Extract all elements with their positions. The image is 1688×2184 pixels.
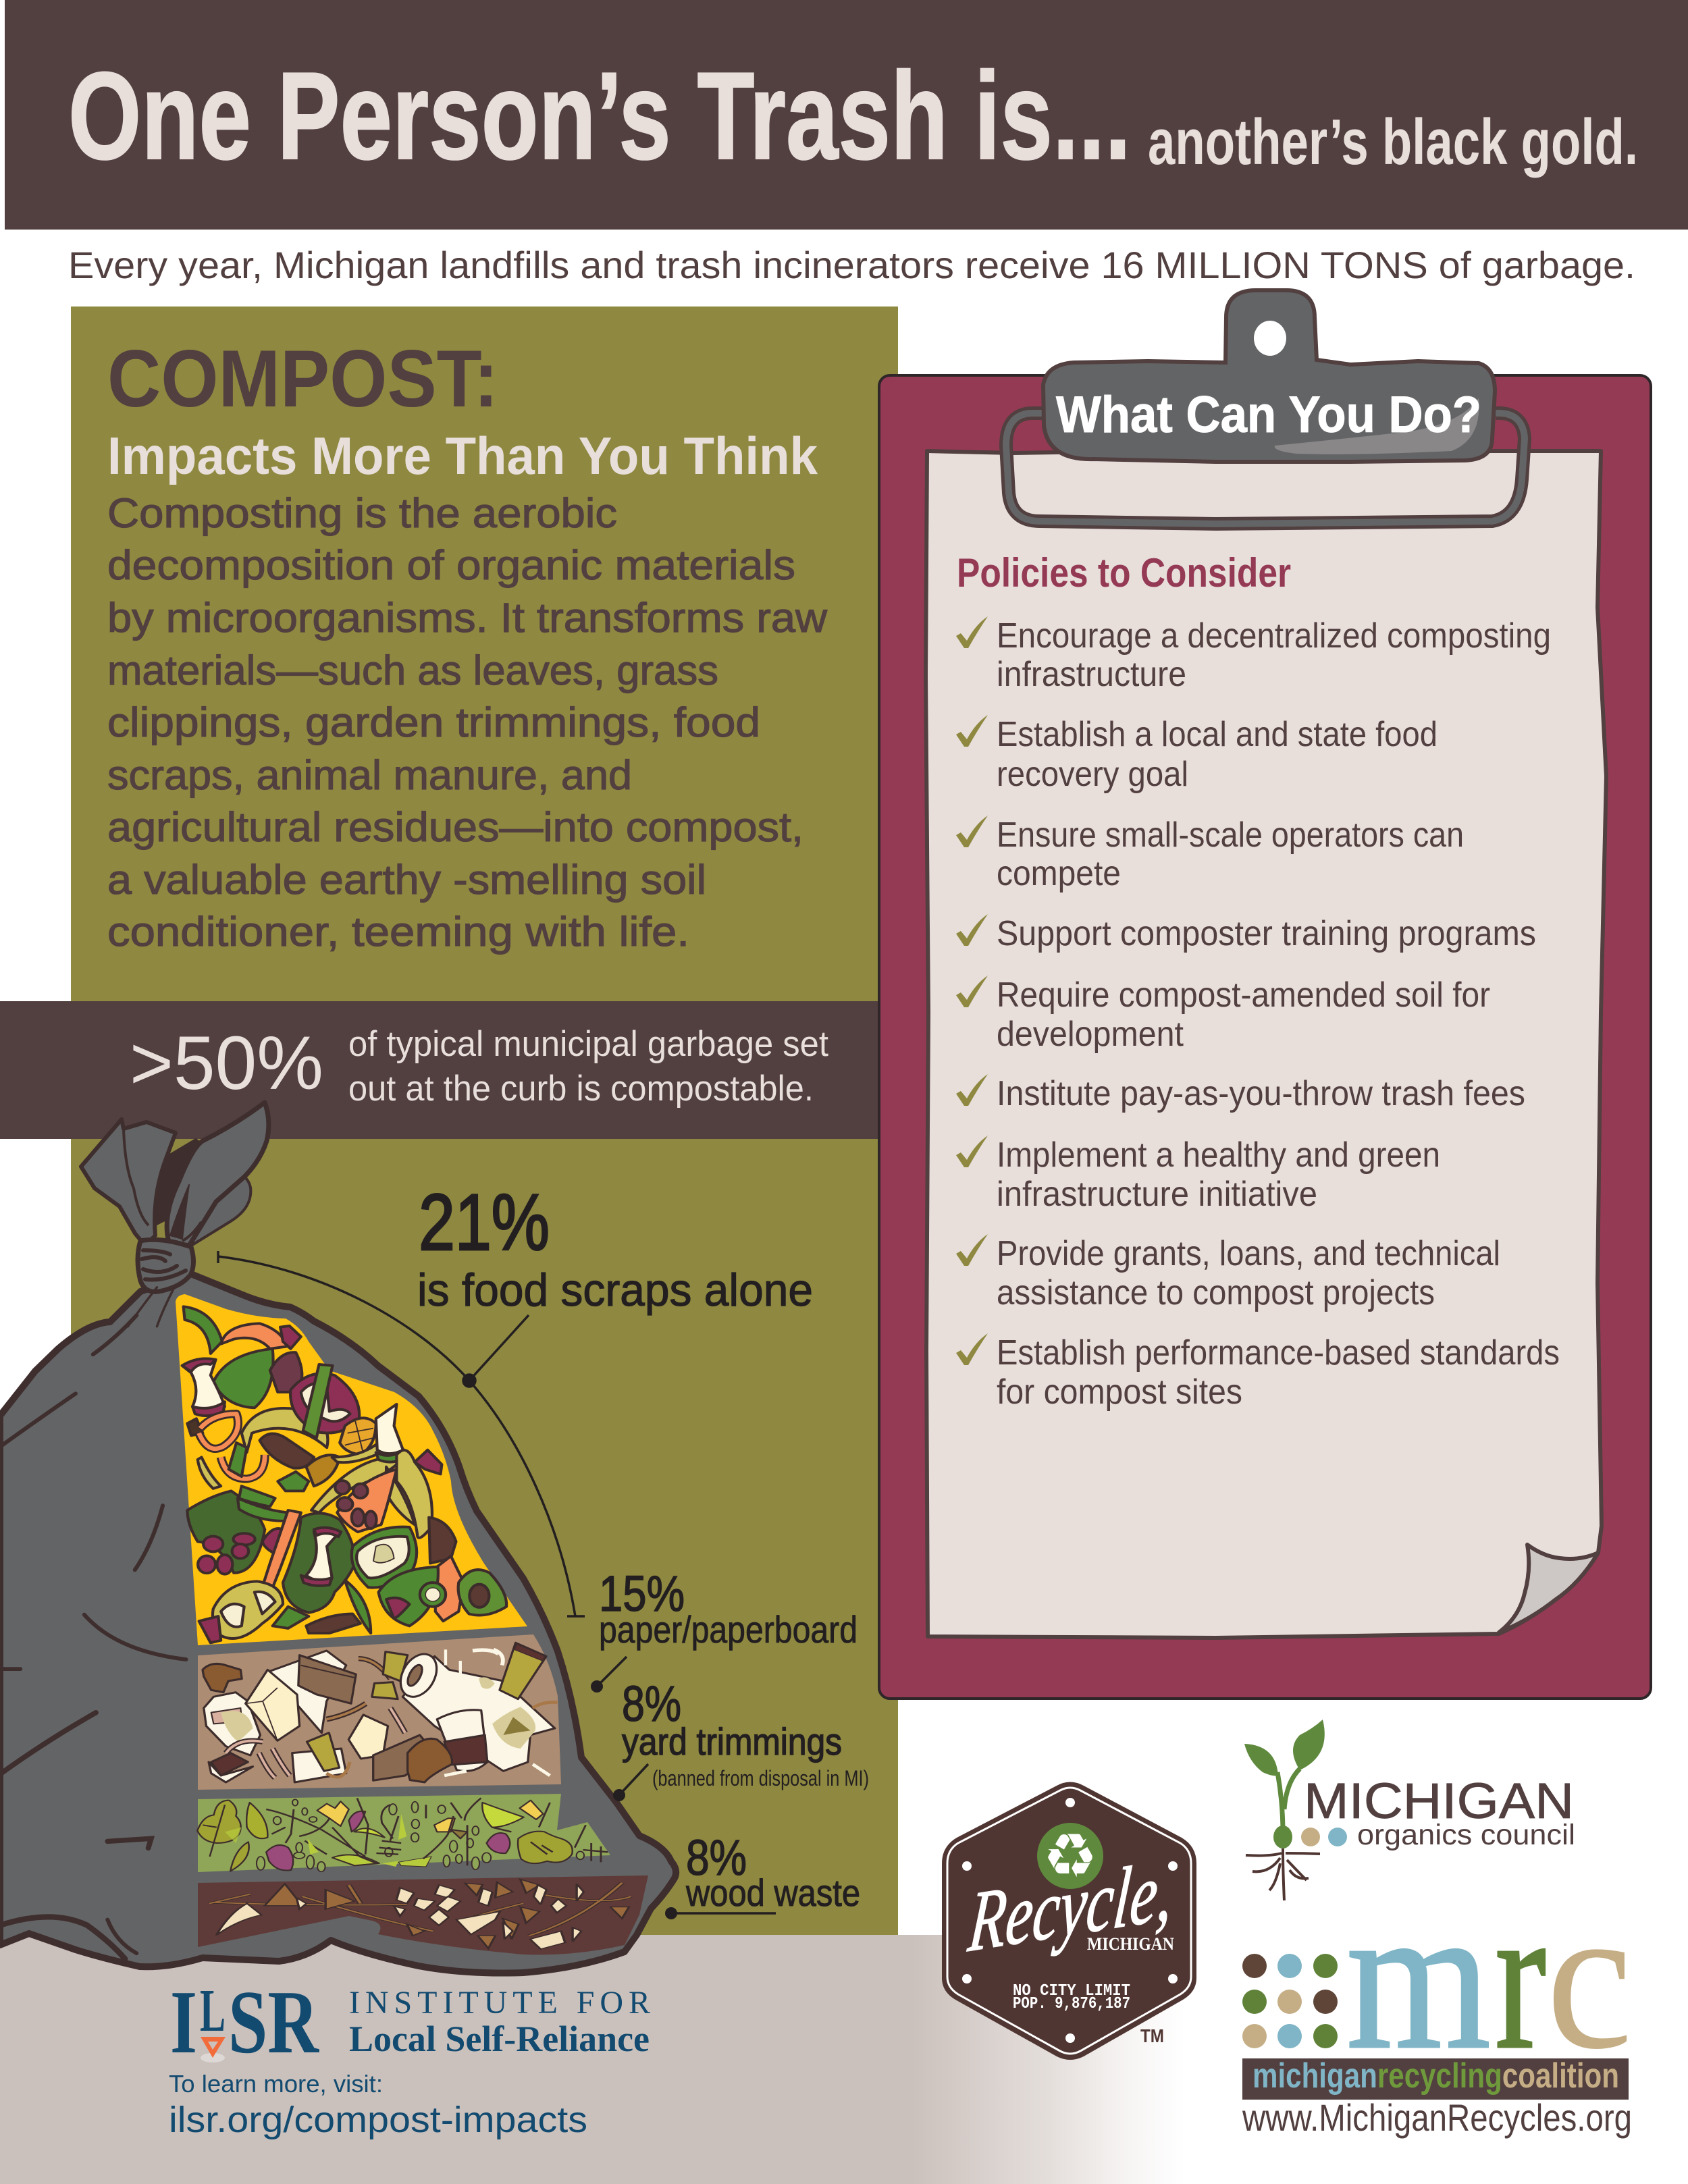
8 percent yard label (613, 1676, 869, 1801)
clipboard paper (926, 451, 1606, 1638)
clip wire loop (1006, 413, 1525, 524)
8 percent wood label: wood waste (685, 1871, 860, 1914)
logo: Michigan Organics Council: organics council (1357, 1819, 1575, 1851)
15 percent label: paper/paperboard (599, 1608, 858, 1651)
logo: ILSR: Local Self-Reliance (349, 2019, 650, 2059)
15 percent label: 15% (599, 1566, 685, 1622)
stat text (348, 1024, 828, 1109)
compost body text (107, 490, 828, 955)
bag wrinkles (0, 1287, 186, 1959)
policies heading: Policies to Consider (957, 550, 1291, 595)
policy list: assistance to compost projects (997, 1273, 1435, 1312)
15 percent label (591, 1566, 858, 1693)
policy list: Encourage a decentralized composting (997, 616, 1551, 656)
clip highlight (1275, 398, 1479, 454)
check marks (956, 616, 988, 1365)
policy list: for compost sites (997, 1373, 1242, 1412)
compost body text: a valuable earthy -smelling soil (107, 857, 706, 903)
8 percent yard label: 8% (622, 1676, 681, 1732)
8 percent yard label: (banned from disposal in MI) (652, 1766, 869, 1790)
learn more link: To learn more, visit: (169, 2070, 383, 2098)
logo: ILSR: INSTITUTE FOR (349, 1985, 650, 2021)
logo: Recycle Michigan: NO CITY LIMIT (1013, 1982, 1130, 2000)
logo: Michigan Recycling Coalition: michiganrecyclingcoalition (1252, 2056, 1619, 2096)
compost body text: clippings, garden trimmings, food (107, 699, 760, 745)
stat text: out at the curb is compostable. (348, 1069, 814, 1109)
compost body text: materials—such as leaves, grass (107, 647, 718, 693)
mrc letters: m (1346, 1863, 1491, 2092)
footer background (0, 1935, 1185, 2184)
logo: Recycle Michigan: Recycle, (965, 1842, 1177, 1970)
labels: composition breakdown (218, 1178, 869, 1919)
compost body text: decomposition of organic materials (107, 542, 795, 588)
policy list: Provide grants, loans, and technical (997, 1234, 1500, 1273)
8 percent yard label: yard trimmings (622, 1720, 842, 1763)
paper curl (1499, 1545, 1598, 1632)
logo: ILSR (170, 1972, 650, 2072)
learn more link (169, 2070, 587, 2140)
logo: Recycle Michigan: MICHIGAN (1087, 1934, 1174, 1954)
21 percent label (417, 1178, 813, 1316)
learn more link: ilsr.org/compost-impacts (169, 2100, 587, 2140)
logo: Recycle Michigan: POP. 9,876,187 (1013, 1995, 1130, 2013)
policy list: Establish a local and state food (997, 715, 1438, 754)
policy list: infrastructure (997, 655, 1186, 694)
header band (5, 0, 1688, 230)
name bar (1242, 2058, 1629, 2100)
logo: Recycle Michigan: TM (1140, 2025, 1164, 2046)
policy list: Establish performance-based standards (997, 1333, 1560, 1373)
compost heading: COMPOST: (107, 334, 498, 424)
wood waste layer (198, 1875, 648, 1954)
big stat: >50% (130, 1021, 323, 1105)
clip body (1043, 290, 1495, 462)
logo: Michigan Organics Council (1244, 1720, 1575, 1900)
compost body text: Composting is the aerobic (107, 490, 617, 536)
paper layer (198, 1634, 561, 1790)
clipboard board (879, 375, 1651, 1699)
sprout (1277, 1769, 1300, 1833)
policy list: Implement a healthy and green (997, 1136, 1440, 1175)
paper illustration (203, 1643, 557, 1782)
clipboard heading: What Can You Do? (1056, 386, 1481, 444)
panel: clipboard (879, 290, 1651, 1699)
title: One Person’s Trash is... (68, 46, 1131, 185)
21 percent label: is food scraps alone (417, 1264, 813, 1316)
logo: ILSR: I (170, 1972, 197, 2072)
policy list (997, 616, 1560, 1412)
food scraps layer (176, 1294, 527, 1645)
8 percent wood label: 8% (686, 1830, 747, 1886)
policy list: compete (997, 854, 1121, 893)
mrc letters: r (1495, 1863, 1546, 2092)
bracket arc (218, 1251, 585, 1616)
policy list: Ensure small-scale operators can (997, 816, 1464, 855)
food scraps illustration (182, 1306, 506, 1643)
clip hole (1254, 321, 1286, 356)
roots (1246, 1848, 1320, 1900)
yard trimmings layer (198, 1794, 610, 1872)
compost body text: scraps, animal manure, and (107, 752, 632, 798)
policy list: Require compost-amended soil for (997, 976, 1490, 1015)
8 percent wood label (665, 1830, 860, 1919)
logo: Recycle Michigan (942, 1782, 1196, 2060)
stat band: over 50 percent (0, 1001, 878, 1139)
wood waste illustration (209, 1880, 631, 1949)
logo: Recycle Michigan: ♻ (1043, 1821, 1097, 1892)
panel: compost olive (71, 307, 898, 1935)
21 percent label: 21% (419, 1178, 550, 1267)
compost body text: conditioner, teeming with life. (107, 909, 689, 955)
bag neck ears (81, 1102, 269, 1247)
policy list: Support composter training programs (997, 914, 1536, 953)
illustration: trash bag (0, 1102, 676, 1973)
logo: ILSR: L (200, 1977, 226, 2044)
logo: ILSR: SR (228, 1972, 319, 2072)
subtitle: Every year, Michigan landfills and trash incinerators receive 16 MILLION TONS of garbage. (68, 244, 1635, 286)
compost subheading: Impacts More Than You Think (107, 426, 818, 485)
logo: Michigan Organics Council: MICHIGAN (1304, 1773, 1574, 1829)
stat text: of typical municipal garbage set (348, 1024, 828, 1064)
mrc letters: c (1546, 1863, 1633, 2092)
bag knot (138, 1240, 193, 1291)
yard trimmings illustration (197, 1798, 608, 1871)
policy list: infrastructure initiative (997, 1175, 1317, 1214)
logo: Michigan Recycling Coalition (1242, 1863, 1633, 2139)
bag body (0, 1274, 676, 1973)
compost body text: by microorganisms. It transforms raw (107, 595, 828, 641)
policy list: Institute pay-as-you-throw trash fees (997, 1074, 1525, 1113)
dot grid (1242, 1954, 1338, 2048)
compost body text: agricultural residues—into compost, (107, 804, 803, 850)
policy list: recovery goal (997, 755, 1188, 794)
policy list: development (997, 1015, 1184, 1054)
mrc letters (1346, 1863, 1633, 2092)
